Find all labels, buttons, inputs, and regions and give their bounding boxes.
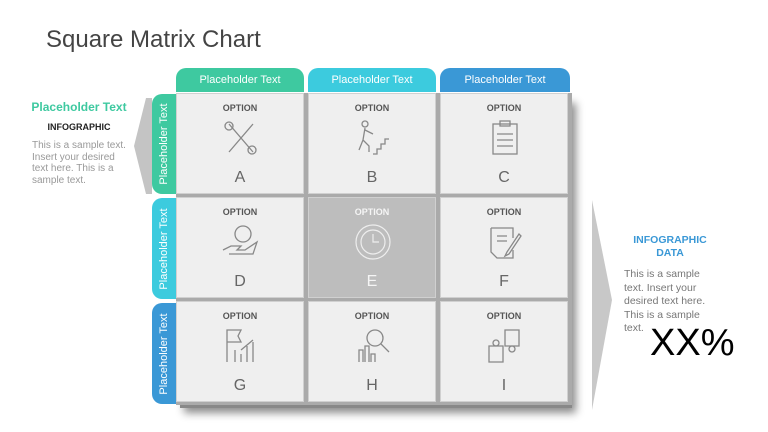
cell B: B (367, 169, 377, 186)
cell G: OPTION (223, 311, 257, 321)
cell I: OPTION (487, 311, 521, 321)
cell B (308, 93, 436, 194)
title: Square Matrix Chart (46, 26, 261, 53)
left text block: This is a sample text. Insert your desired text here. This is a sample text. (32, 140, 126, 186)
cell F: F (499, 273, 509, 290)
matrix shadow (180, 98, 572, 408)
cell A: A (235, 169, 245, 186)
cell H (308, 301, 436, 402)
column headers: Placeholder Text (331, 74, 413, 86)
column headers (176, 68, 570, 92)
cell H: OPTION (355, 311, 389, 321)
right text block: DATA (656, 247, 684, 259)
left text block: Placeholder Text (31, 100, 127, 114)
cell E: OPTION (355, 207, 389, 217)
cell C (440, 93, 568, 194)
cell F: OPTION (487, 207, 521, 217)
big value: XX% (650, 322, 734, 364)
left arrow (134, 98, 152, 194)
left text block (31, 100, 127, 186)
row headers: Placeholder Text (158, 103, 170, 185)
cell D: D (234, 273, 246, 290)
cell C: OPTION (487, 103, 521, 113)
cell E: E (367, 273, 377, 290)
cell B: OPTION (355, 103, 389, 113)
cell D (176, 197, 304, 298)
cell A (176, 93, 304, 194)
cell I (440, 301, 568, 402)
cell H: H (366, 377, 378, 394)
right arrow (592, 200, 612, 410)
column headers: Placeholder Text (464, 74, 546, 86)
column headers: Placeholder Text (199, 74, 281, 86)
cell E (308, 197, 436, 298)
cell I: I (502, 377, 506, 394)
left text block: INFOGRAPHIC (48, 122, 110, 132)
row headers (152, 94, 176, 404)
cell C: C (498, 169, 510, 186)
cell G (176, 301, 304, 402)
row headers: Placeholder Text (158, 313, 170, 394)
cell F (440, 197, 568, 298)
right text block (624, 234, 707, 334)
row headers: Placeholder Text (158, 208, 170, 289)
grid (176, 93, 572, 405)
cell D: OPTION (223, 207, 257, 217)
cell A: OPTION (223, 103, 257, 113)
right text block: INFOGRAPHIC (633, 234, 707, 246)
cell G: G (234, 377, 246, 394)
right text block: This is a sample text. Insert your desired text here. This is a sample text. (624, 268, 705, 334)
